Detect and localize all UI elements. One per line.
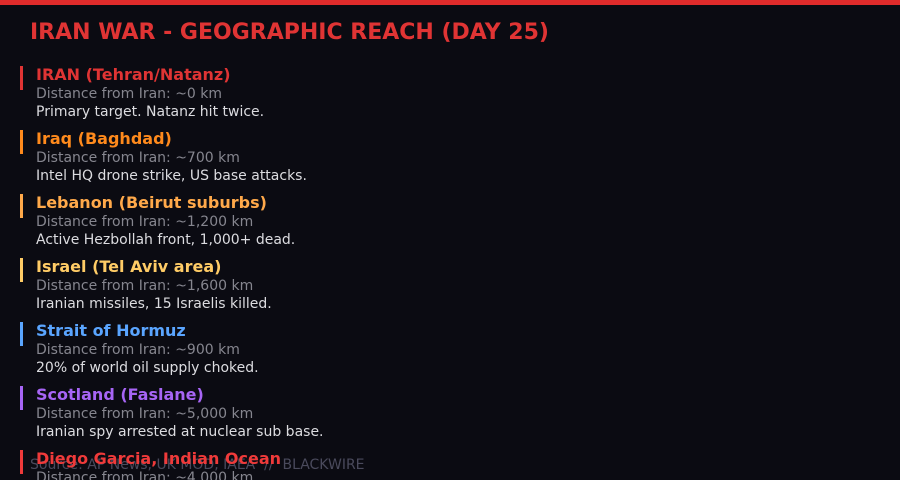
title: IRAN WAR - GEOGRAPHIC REACH (DAY 25) xyxy=(30,20,549,45)
entry: Hormuz: Distance from Iran: ~900 km xyxy=(36,342,240,358)
entry: Diego Garcia xyxy=(20,450,281,480)
entry: Israel xyxy=(20,257,272,312)
entry: Scotland xyxy=(20,385,324,440)
entry: Lebanon: Active Hezbollah front, 1,000+ dead. xyxy=(36,232,295,248)
entry: Iran: IRAN (Tehran/Natanz) xyxy=(36,65,231,84)
entry: Hormuz: 20% of world oil supply choked. xyxy=(36,360,259,376)
entry: Israel: Israel (Tel Aviv area) xyxy=(36,257,221,276)
source footer: Source: AP News, UK MOD, IAEA // BLACKWIRE xyxy=(30,457,365,473)
entry: Lebanon: Distance from Iran: ~1,200 km xyxy=(36,214,253,230)
entry: Iran: Primary target. Natanz hit twice. xyxy=(36,104,264,120)
entry: Iraq: Iraq (Baghdad) xyxy=(36,129,172,148)
entry: Israel: Distance from Iran: ~1,600 km xyxy=(36,278,253,294)
entry: Scotland: Iranian spy arrested at nuclear sub base. xyxy=(36,424,324,440)
entry: Hormuz: Strait of Hormuz xyxy=(36,321,186,340)
entry: Scotland: Scotland (Faslane) xyxy=(36,385,204,404)
entry: Iran: Distance from Iran: ~0 km xyxy=(36,86,222,102)
entry: Scotland: Distance from Iran: ~5,000 km xyxy=(36,406,253,422)
entry: Lebanon xyxy=(20,193,295,248)
entry: Iraq xyxy=(20,129,307,184)
entry: Iraq: Intel HQ drone strike, US base attacks. xyxy=(36,168,307,184)
entry: Iraq: Distance from Iran: ~700 km xyxy=(36,150,240,166)
entry: Israel: Iranian missiles, 15 Israelis killed. xyxy=(36,296,272,312)
entry: Iran xyxy=(20,65,264,120)
entry: Hormuz xyxy=(20,321,259,376)
entry: Lebanon: Lebanon (Beirut suburbs) xyxy=(36,193,267,212)
